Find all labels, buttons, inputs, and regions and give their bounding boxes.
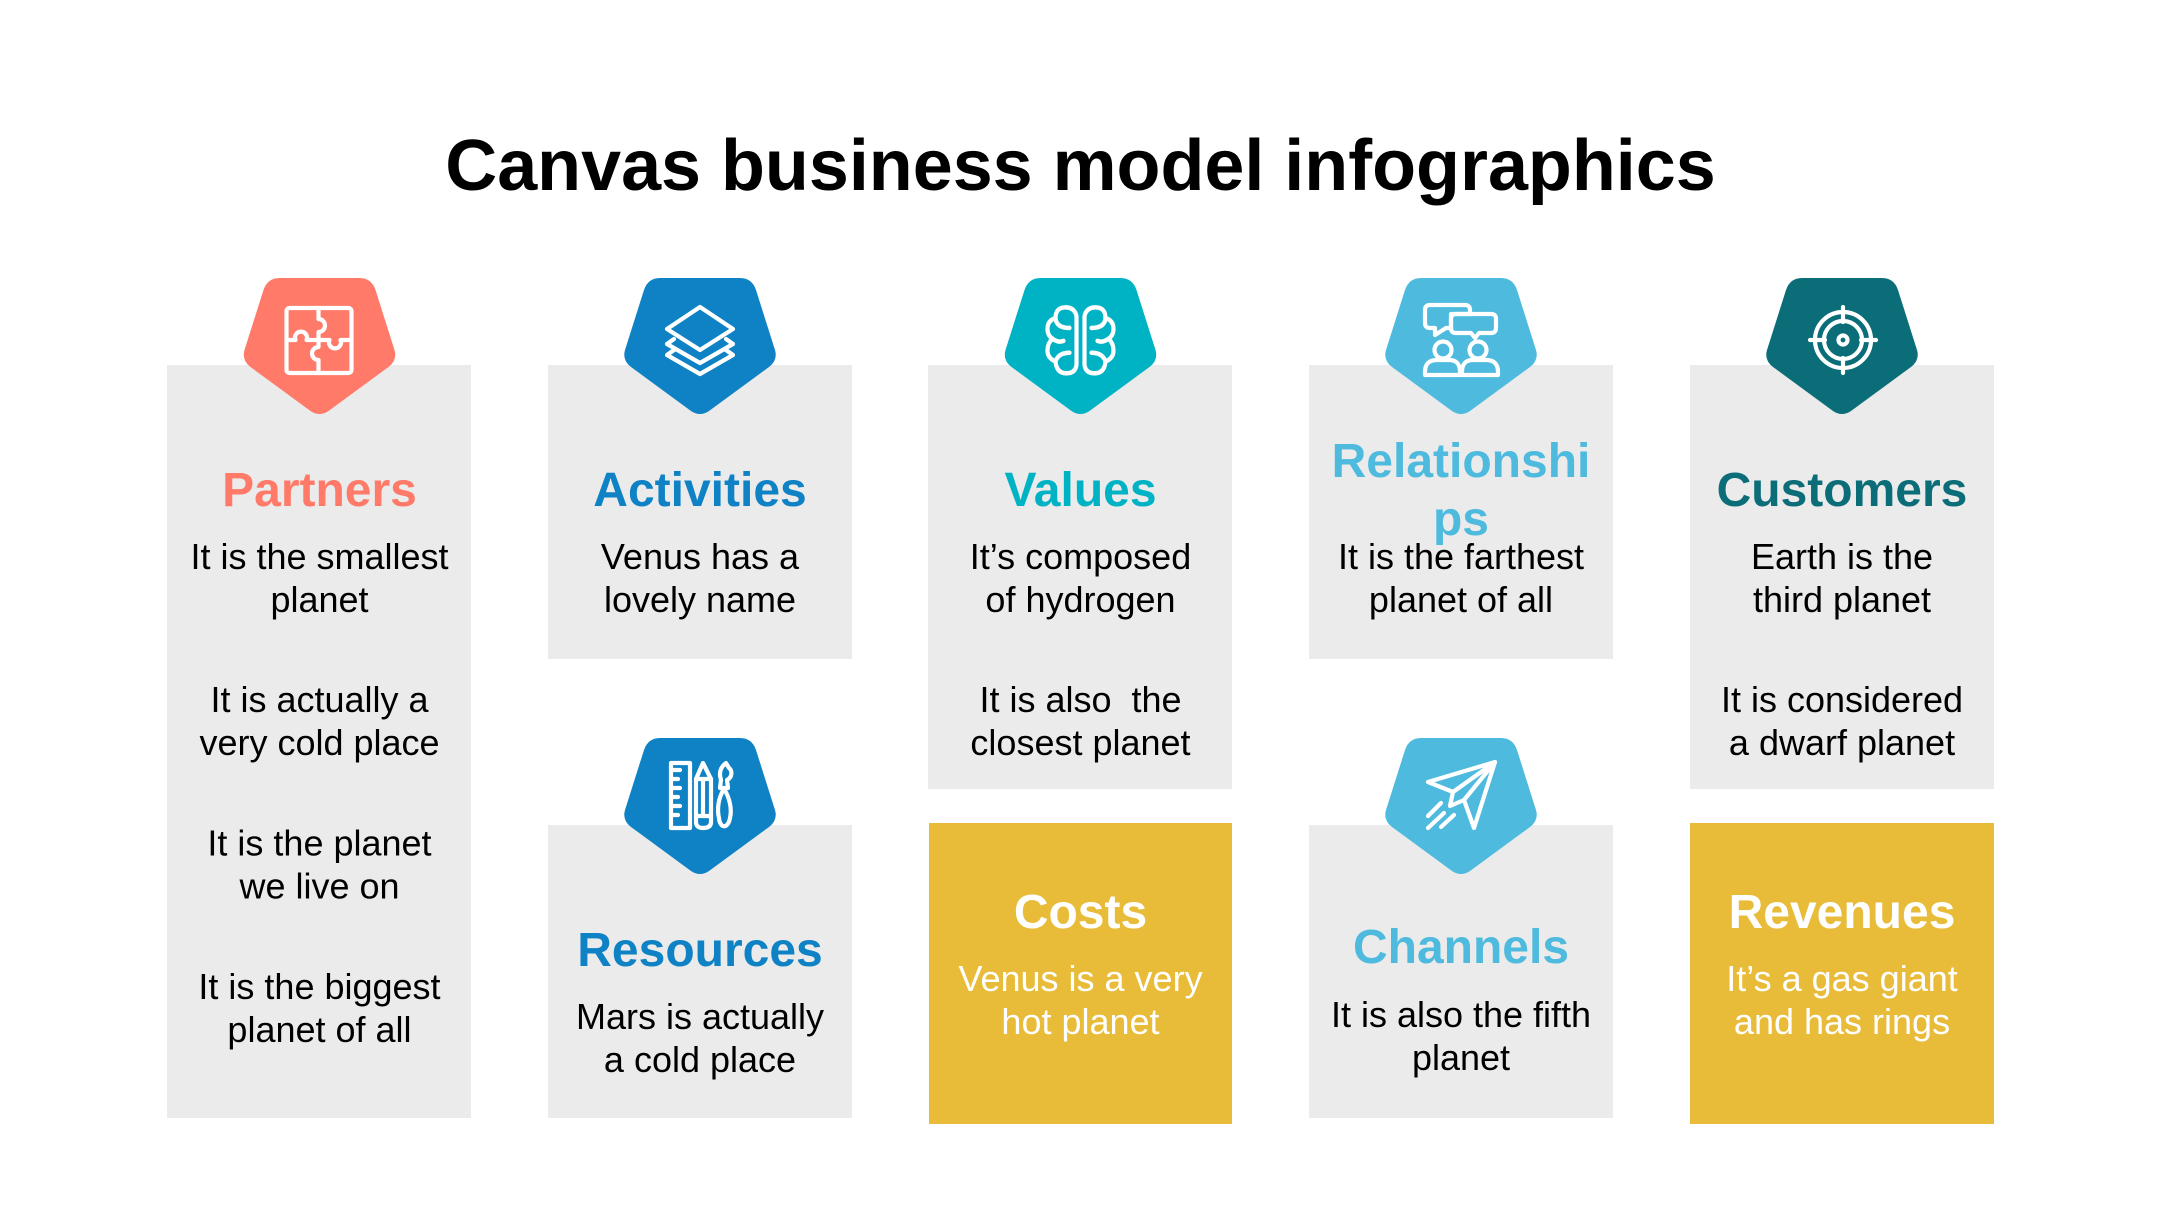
text: partners descriptions	[190, 536, 449, 1050]
heading: values: Values	[1004, 464, 1157, 517]
text: customers descriptions: Earth is the	[1751, 536, 1933, 577]
text: resources description: Mars is actually	[576, 996, 824, 1037]
text: partners descriptions: planet	[270, 579, 369, 620]
heading: resources: Resources	[577, 924, 823, 977]
text: values descriptions: It’s composed	[970, 536, 1191, 577]
text: partners descriptions: we live on	[238, 866, 400, 906]
panel: relationships	[1309, 278, 1613, 659]
text: activities description: Venus has a	[601, 536, 800, 577]
text: partners descriptions: It is the biggest	[198, 966, 441, 1007]
text: relationships description: planet of all	[1369, 579, 1553, 620]
text: customers descriptions: third planet	[1753, 579, 1931, 620]
text: channels description	[1331, 994, 1591, 1078]
heading: costs: Costs	[1014, 886, 1147, 939]
panel: activities	[548, 278, 852, 659]
panel: customers	[1690, 278, 1994, 789]
heading: revenues: Revenues	[1729, 886, 1955, 939]
text: values descriptions	[970, 536, 1191, 763]
heading: activities: Activities	[593, 464, 807, 517]
text: values descriptions: It is also the	[979, 679, 1182, 720]
panel: revenues	[1690, 823, 1994, 1124]
icon: layers	[624, 278, 776, 414]
panel: resources	[548, 738, 852, 1118]
heading: relationships: ps	[1433, 493, 1489, 546]
text: revenues description: and has rings	[1734, 1001, 1950, 1042]
heading: customers: Customers	[1717, 464, 1967, 517]
panel: channels	[1309, 738, 1613, 1118]
panel: costs	[929, 823, 1232, 1124]
icon: target	[1766, 278, 1918, 414]
text: partners descriptions: It is actually a	[210, 679, 430, 720]
icon: people talking	[1385, 278, 1537, 414]
text: relationships description	[1338, 536, 1584, 620]
text: activities description: lovely name	[604, 579, 796, 620]
heading: relationships: Relationshi	[1332, 435, 1590, 488]
text: costs description	[958, 958, 1203, 1042]
heading: channels: Channels	[1353, 921, 1569, 974]
text: revenues description	[1726, 958, 1958, 1042]
text: values descriptions: closest planet	[970, 722, 1191, 763]
text: partners descriptions: It is the planet	[207, 822, 432, 864]
heading: partners: Partners	[222, 464, 417, 517]
text: costs description: Venus is a very	[958, 958, 1203, 999]
text: channels description: planet	[1412, 1037, 1510, 1078]
title: Canvas business model infographics	[445, 126, 1716, 206]
text: revenues description: It’s a gas giant	[1726, 958, 1958, 999]
text: activities description	[601, 536, 800, 620]
text: partners descriptions: planet of all	[227, 1009, 412, 1050]
heading: relationships	[1332, 435, 1590, 546]
text: relationships description: It is the farthest	[1338, 536, 1584, 577]
text: customers descriptions: a dwarf planet	[1729, 722, 1955, 763]
text: partners descriptions: It is the smallest	[190, 536, 449, 577]
text: resources description	[576, 996, 824, 1080]
panel: values	[928, 278, 1232, 789]
panel: partners	[167, 278, 471, 1118]
text: partners descriptions: very cold place	[199, 722, 440, 763]
text: customers descriptions: It is considered	[1721, 679, 1963, 720]
icon: paper plane	[1385, 738, 1537, 874]
text: costs description: hot planet	[1001, 1001, 1160, 1042]
icon: puzzle	[244, 278, 395, 414]
text: resources description: a cold place	[604, 1039, 796, 1080]
text: values descriptions: of hydrogen	[985, 579, 1176, 620]
text: customers descriptions	[1721, 536, 1963, 763]
icon: ruler, pencil and brush	[624, 738, 776, 874]
icon: brain	[1005, 278, 1156, 414]
text: channels description: It is also the fifth	[1331, 994, 1591, 1035]
